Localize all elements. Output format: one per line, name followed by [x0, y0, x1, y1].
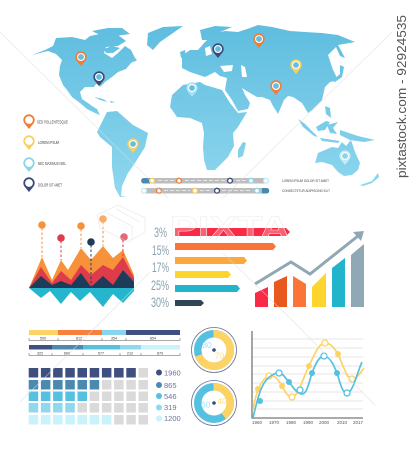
waffle legend: 546 [164, 392, 177, 401]
bar 15% [175, 243, 276, 250]
year axis labels: 2017 [353, 420, 364, 425]
bar 17% [175, 257, 247, 264]
legend text: navy: DOLOR SIT AMET [38, 182, 62, 188]
red area [29, 257, 134, 288]
Pin: yellow Asia [290, 59, 302, 74]
stacked bar 1 [29, 330, 180, 340]
trend arrow [255, 236, 358, 284]
legend text: light blue: NEC MAXIMUS NISL [38, 161, 66, 166]
Africa [170, 82, 247, 170]
bar 30% [175, 300, 204, 306]
year axis labels: 1960 [252, 420, 263, 425]
percentage labels: 30% [151, 294, 169, 310]
watermark lines [0, 32, 392, 405]
map legend [23, 114, 68, 192]
donut chart 30/70: 30 [202, 340, 212, 350]
percentage labels: 15% [152, 242, 169, 258]
year axis labels: 1970 [269, 420, 280, 425]
Pin: pale Australia [339, 150, 351, 165]
year axis labels: 1980 [286, 420, 297, 425]
Madagascar [238, 142, 246, 158]
mountain area chart [29, 215, 134, 307]
watermark text: PIXTA [170, 210, 290, 246]
Arctic islands and Newfoundland [92, 28, 137, 62]
New Zealand [360, 173, 379, 186]
waffle legend [156, 368, 181, 423]
donut chart 60/40: 60 [201, 400, 210, 410]
timeline row 1 [141, 178, 269, 184]
inland seas [205, 46, 247, 77]
North America [32, 33, 136, 115]
Australia [315, 140, 360, 176]
row 5 pale [29, 415, 111, 424]
stacked bar 2: 879 [157, 352, 163, 356]
legend pin: orange [23, 114, 35, 129]
Pin: yellow South America [127, 138, 139, 153]
marker dots [38, 215, 128, 246]
Japan [332, 65, 344, 82]
world map [32, 25, 379, 197]
percentage labels [151, 224, 169, 310]
Pin: navy Europe [212, 43, 224, 58]
Cuba and Caribbean [94, 97, 115, 103]
stock id text: pixtastock.com - 92924535 [394, 15, 409, 178]
growth bar chart with arrow [255, 231, 364, 307]
waffle grid [29, 368, 148, 424]
percentage labels: 17% [152, 259, 169, 275]
stacked bar 2: 212 [127, 352, 133, 356]
row 4 light [29, 403, 75, 412]
line chart [252, 331, 364, 425]
Pin: orange Russia [253, 33, 265, 48]
Pin: navy North America [93, 71, 105, 86]
timeline row 2 [141, 188, 269, 194]
teal mirrored area [29, 288, 134, 307]
blue series [253, 353, 362, 418]
stacked bar 1: 812 [76, 336, 82, 340]
empty cells [78, 368, 148, 424]
timeline caption 1: LOREM IPSUM DOLOR SIT AMET [282, 178, 329, 183]
stacked bar 2 [29, 345, 180, 356]
South America [97, 111, 148, 197]
waffle legend: 1200 [164, 414, 181, 423]
donut chart 60/40 [192, 380, 236, 426]
year axis labels [252, 420, 364, 425]
stacked bar 1: 500 [40, 336, 46, 340]
Pin: pale Africa [186, 82, 198, 97]
Southeast Asia islands [298, 106, 375, 143]
stacked bar 2: 322 [37, 352, 43, 356]
bar teal [175, 285, 240, 292]
year axis labels: 2010 [337, 420, 348, 425]
row 3 sky [29, 392, 87, 401]
donut chart 30/70: 70 [215, 350, 224, 360]
percentage arrow bars [151, 224, 290, 310]
legend text: yellow: LOREM IPSUM [38, 140, 59, 145]
year axis labels: 1990 [303, 420, 314, 425]
legend pin: navy [23, 177, 35, 192]
year axis labels: 2000 [319, 420, 330, 425]
timeline caption 2: CONSECTETUR ADIPISCING ELIT [282, 188, 330, 193]
donut chart 60/40: 40 [217, 396, 227, 406]
bar 25% [175, 271, 231, 278]
Pin: orange India [270, 80, 282, 95]
Greenland [147, 26, 183, 50]
row 1 navy [29, 368, 136, 378]
percentage labels: 3% [154, 224, 167, 240]
bar 3% [175, 228, 290, 236]
percentage labels: 25% [151, 277, 169, 293]
legend pin: light blue [23, 157, 35, 172]
stacked bar 2: 577 [98, 352, 104, 356]
navy area [29, 270, 134, 288]
Eurasia [182, 25, 355, 114]
orange area [29, 246, 134, 288]
legend text: orange: SED POLLENTESQUE [37, 120, 68, 124]
stacked bar 1: 854 [150, 336, 156, 340]
legend pin: yellow [23, 135, 35, 150]
donut chart 30/70 [192, 328, 236, 372]
yellow series [253, 340, 364, 410]
dashed stems [42, 222, 123, 287]
waffle legend: 865 [164, 381, 177, 390]
Pin: orange North America [75, 51, 87, 66]
stacked bar 1: 354 [111, 336, 117, 340]
waffle legend: 1960 [164, 368, 181, 378]
British Isles and Scandinavia [180, 26, 232, 58]
waffle legend: 319 [164, 403, 177, 412]
stacked bar 2: 669 [64, 352, 70, 356]
row 2 blue [29, 380, 99, 390]
